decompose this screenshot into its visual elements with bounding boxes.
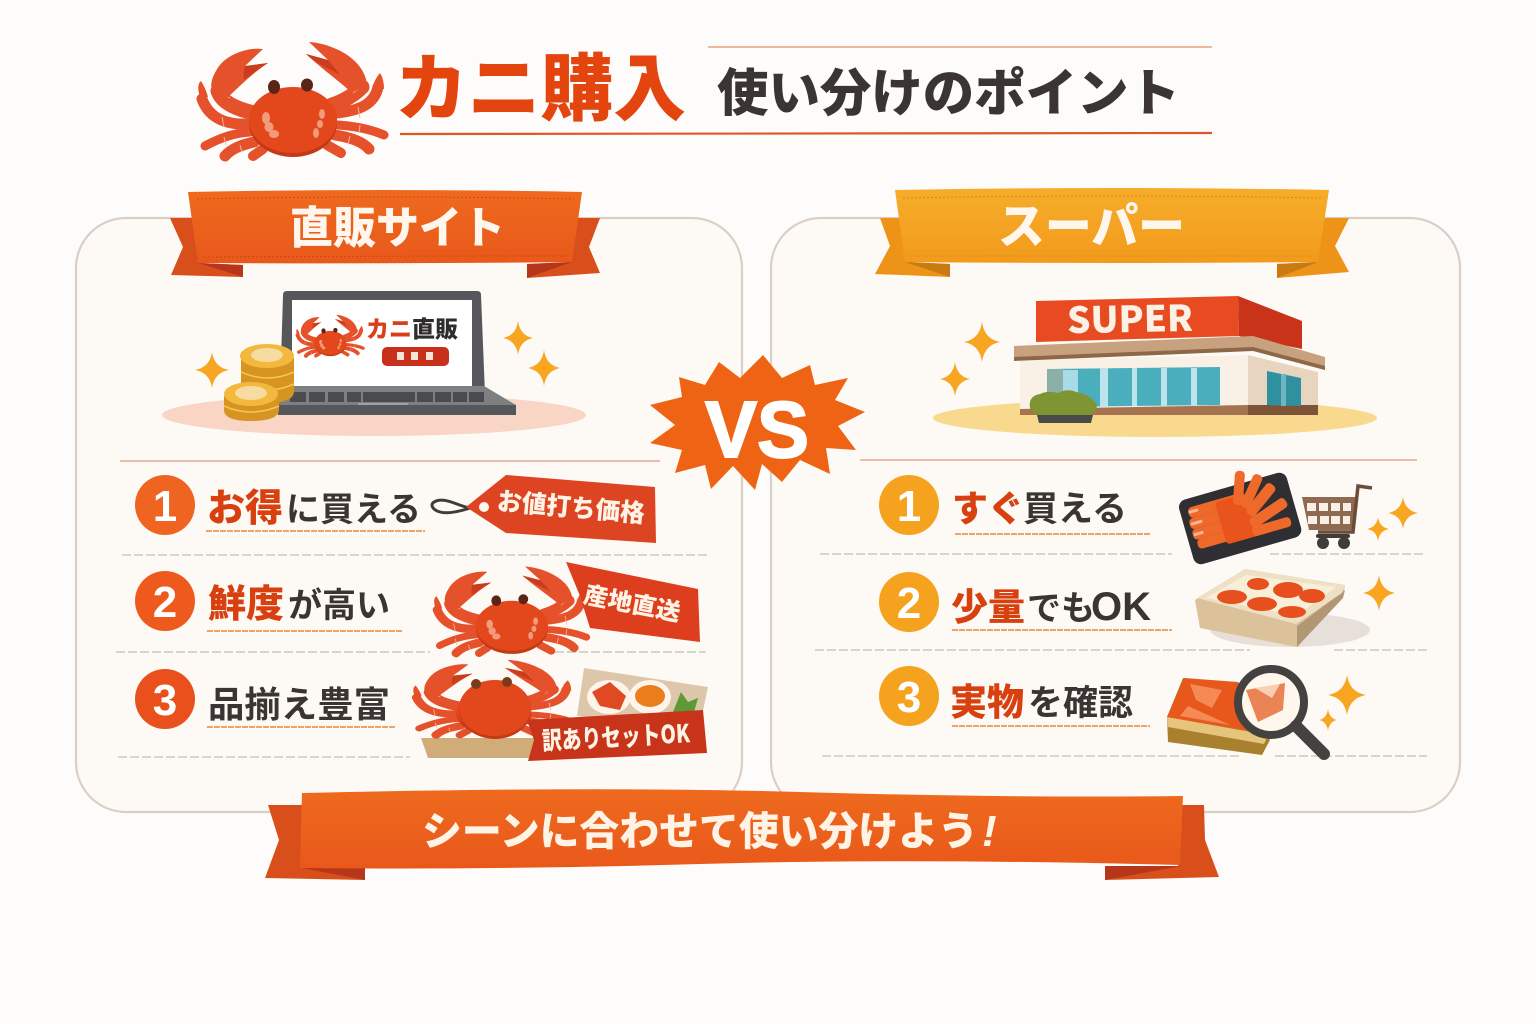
- item 3: [879, 666, 1150, 726]
- ribbon: direct sales heading: 直販サイト: [290, 192, 505, 256]
- store building: [1014, 290, 1325, 423]
- ribbon: supermarket heading: [875, 187, 1349, 278]
- item 3: 実物: [950, 672, 1024, 726]
- illustration: crab with origin flag: [434, 562, 700, 654]
- vs badge: [650, 355, 865, 490]
- item 1: [135, 475, 425, 535]
- list: direct sales: [135, 475, 708, 761]
- store sign text: SUPER: [1067, 290, 1193, 344]
- item 2: OK: [1091, 585, 1151, 629]
- laptop: [278, 291, 516, 415]
- item 2: 2: [897, 579, 921, 628]
- item 3: 品揃え豊富: [208, 676, 390, 728]
- illustration: crab set with banner: [413, 660, 708, 761]
- bottom ribbon: [265, 789, 1219, 880]
- price tag: [432, 475, 656, 543]
- item 1: すぐ: [952, 480, 1024, 532]
- vs badge: VS: [705, 385, 809, 474]
- item 3: [135, 669, 395, 729]
- sparkles: [195, 321, 560, 388]
- illustration: small portion box: [1195, 569, 1395, 647]
- dividers: [116, 460, 1427, 757]
- item 3: 3: [897, 673, 921, 722]
- illustration: laptop with coins: [162, 291, 586, 436]
- illustration: supermarket: [933, 290, 1377, 437]
- item 1: 買える: [1023, 481, 1127, 532]
- item 3: を確認: [1028, 675, 1133, 726]
- bottom ribbon: !: [982, 807, 997, 856]
- panel: supermarket: [771, 218, 1460, 812]
- item 3: 3: [153, 676, 177, 725]
- item 2: が高い: [288, 578, 390, 627]
- panel: direct sales: [76, 218, 742, 812]
- item 2: でも: [1027, 581, 1095, 630]
- price tag: お値打ち価格: [496, 482, 646, 530]
- item 1: [879, 475, 1150, 535]
- item 1: お得: [207, 477, 283, 532]
- list: supermarket: [879, 458, 1418, 755]
- bottom ribbon: シーンに合わせて使い分けよう: [422, 799, 978, 857]
- icon: title crab: [198, 42, 384, 157]
- item 2: [879, 572, 1172, 632]
- ribbon: supermarket heading: スーパー: [998, 187, 1185, 257]
- item 1: 1: [897, 482, 921, 531]
- item 2: 少量: [951, 577, 1025, 631]
- coins: [224, 344, 294, 421]
- item 1: に買える: [286, 482, 421, 531]
- title sub: 使い分けのポイント: [717, 52, 1180, 126]
- shopping cart: [1302, 486, 1372, 549]
- laptop: 直販: [412, 310, 458, 344]
- title main: カニ購入: [395, 30, 686, 136]
- title block: [198, 30, 1212, 157]
- ribbon: direct sales heading: [170, 190, 600, 278]
- laptop: カニ: [366, 310, 412, 344]
- illustration: magnifier over crab: [1167, 669, 1366, 755]
- item 2: [135, 571, 402, 631]
- item 2: 2: [153, 578, 177, 627]
- item 1: 1: [153, 482, 177, 531]
- illustration: crab tray and cart: [1173, 458, 1418, 566]
- illustration: crab set with banner: 訳ありセットOK: [541, 714, 691, 758]
- item 2: 鮮度: [208, 573, 284, 628]
- illustration: crab with origin flag: 産地直送: [581, 575, 684, 628]
